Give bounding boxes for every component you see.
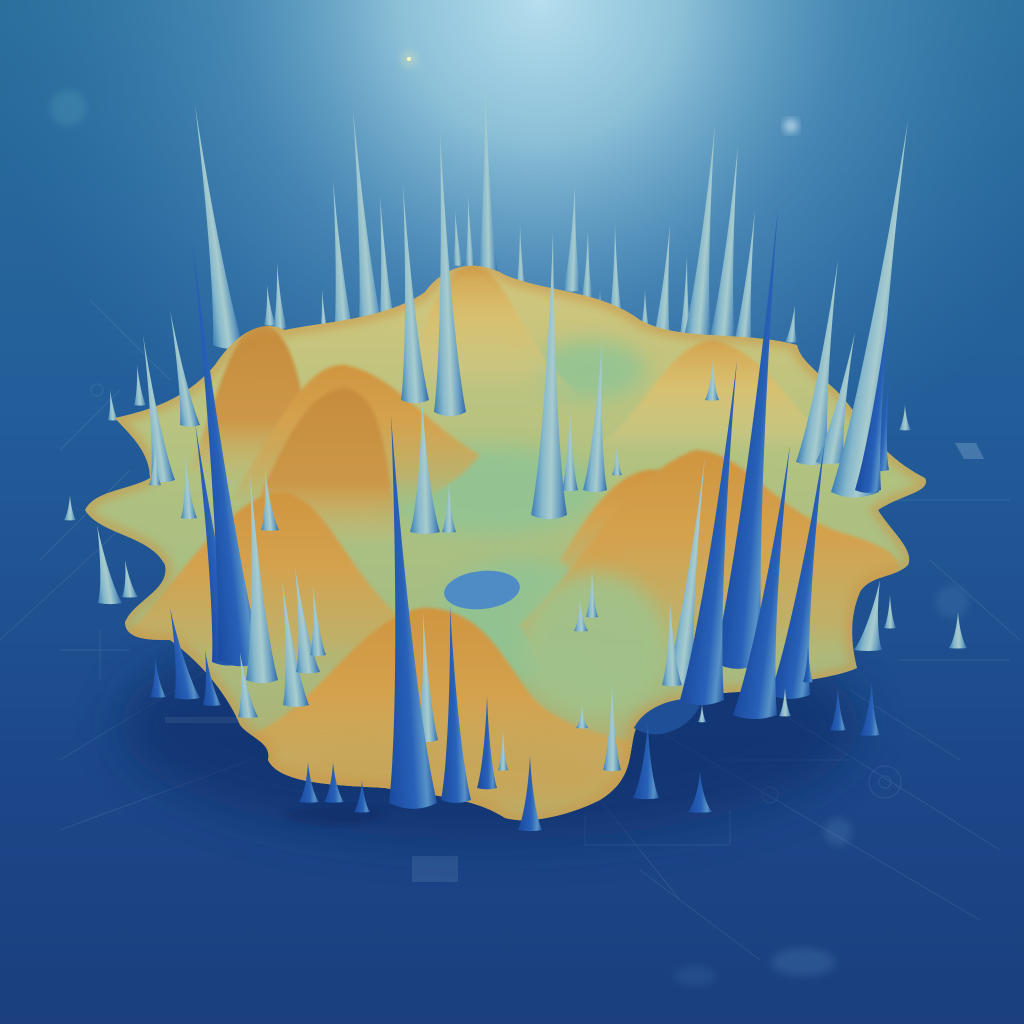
lake [442, 567, 522, 613]
terrain rim glow [85, 266, 926, 820]
big right hill [520, 448, 899, 662]
left rear spikes [64, 310, 200, 604]
back hills [193, 266, 808, 470]
front hill lower glow [288, 776, 570, 807]
terrain hills [85, 265, 926, 860]
big right hill ridge [560, 468, 659, 569]
right green side shading [523, 573, 667, 717]
foreground small spikes [285, 580, 967, 825]
terrain base [85, 266, 926, 820]
floor technical grid lines [0, 300, 1020, 960]
mid-left hills [230, 365, 480, 547]
front hill [250, 606, 633, 820]
back row spikes [180, 75, 801, 362]
floor rectangles [165, 443, 984, 882]
land drop shadow [120, 610, 860, 840]
right blue spike cluster [660, 207, 845, 722]
right rear spike cluster [796, 120, 932, 498]
mid terrain spikes [389, 130, 720, 728]
left front hill [128, 492, 396, 680]
left outer spikes behind terrain [105, 365, 146, 420]
front blue spikes [367, 415, 621, 831]
right shore inlet [634, 699, 702, 734]
green valleys [380, 340, 645, 680]
top light glow [0, 0, 1024, 600]
left blue spike cluster [147, 240, 326, 718]
